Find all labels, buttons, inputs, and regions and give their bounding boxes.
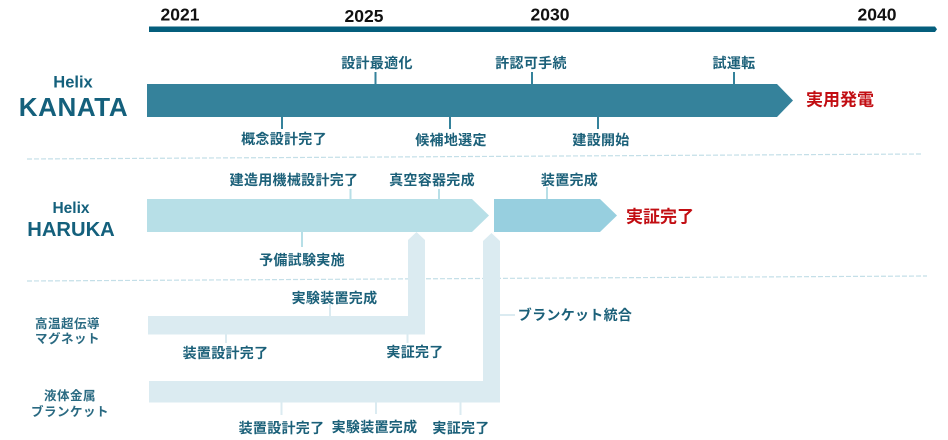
KANATA milestone labels [241,55,755,148]
HARUKA milestone labels: 真空容器完成 [389,172,475,188]
year 2021: 2021 [161,4,200,24]
KANATA milestone labels: 候補地選定 [415,132,487,148]
HARUKA name [27,200,115,241]
magnet name [35,316,100,346]
KANATA milestone labels: 試運転 [713,55,755,71]
magnet milestone labels: 装置設計完了 [183,345,268,361]
HARUKA name: HARUKA [27,219,115,241]
panel: liquid metal blanket [31,233,632,436]
blanket name [31,388,109,419]
magnet milestone labels: 実証完了 [386,344,444,360]
HARUKA milestone ticks [302,187,547,247]
timeline axis [149,4,937,32]
KANATA goal: 実用発電 [806,90,874,110]
KANATA milestone labels: 許認可手続 [495,55,567,71]
magnet name: 高温超伝導 [35,316,100,331]
KANATA milestone labels: 設計最適化 [341,55,413,71]
magnet milestone labels: 実験装置完成 [292,290,377,306]
blanket name: 液体金属 [44,388,96,403]
year 2030: 2030 [531,4,570,24]
HARUKA goal: 実証完了 [626,208,694,226]
blanket milestone labels: ブランケット統合 [518,307,632,323]
HARUKA first arrow [147,199,489,232]
HARUKA milestone labels: 建造用機械設計完了 [230,172,358,188]
KANATA name [19,74,128,122]
KANATA name: KANATA [19,92,128,122]
blanket milestone labels: 実証完了 [432,420,490,436]
HARUKA second arrow [494,199,617,232]
blanket ticks [282,315,515,415]
panel: Helix KANATA [19,55,874,148]
magnet milestone labels [183,290,444,361]
year 2025: 2025 [345,6,384,26]
blanket name: ブランケット [31,404,109,419]
year 2040: 2040 [858,4,897,24]
KANATA milestone labels: 建設開始 [572,132,630,148]
magnet name: マグネット [35,331,100,346]
panel: Helix HARUKA [27,172,694,268]
KANATA arrow bar [147,84,793,117]
HARUKA milestone labels: 予備試験実施 [259,252,345,268]
blanket milestone labels: 装置設計完了 [239,420,324,436]
panel: high temperature superconducting magnet [35,232,444,361]
magnet elbow arrow [148,232,425,334]
blanket milestone labels [239,307,632,436]
KANATA milestone labels: 概念設計完了 [241,131,327,147]
KANATA name: Helix [53,74,94,92]
blanket milestone labels: 実験装置完成 [332,419,417,435]
HARUKA milestone labels [230,172,598,268]
blanket elbow arrow [149,233,500,402]
HARUKA milestone labels: 装置完成 [541,172,598,188]
HARUKA name: Helix [52,200,90,217]
magnet ticks [226,304,408,343]
KANATA milestone ticks [282,72,734,129]
